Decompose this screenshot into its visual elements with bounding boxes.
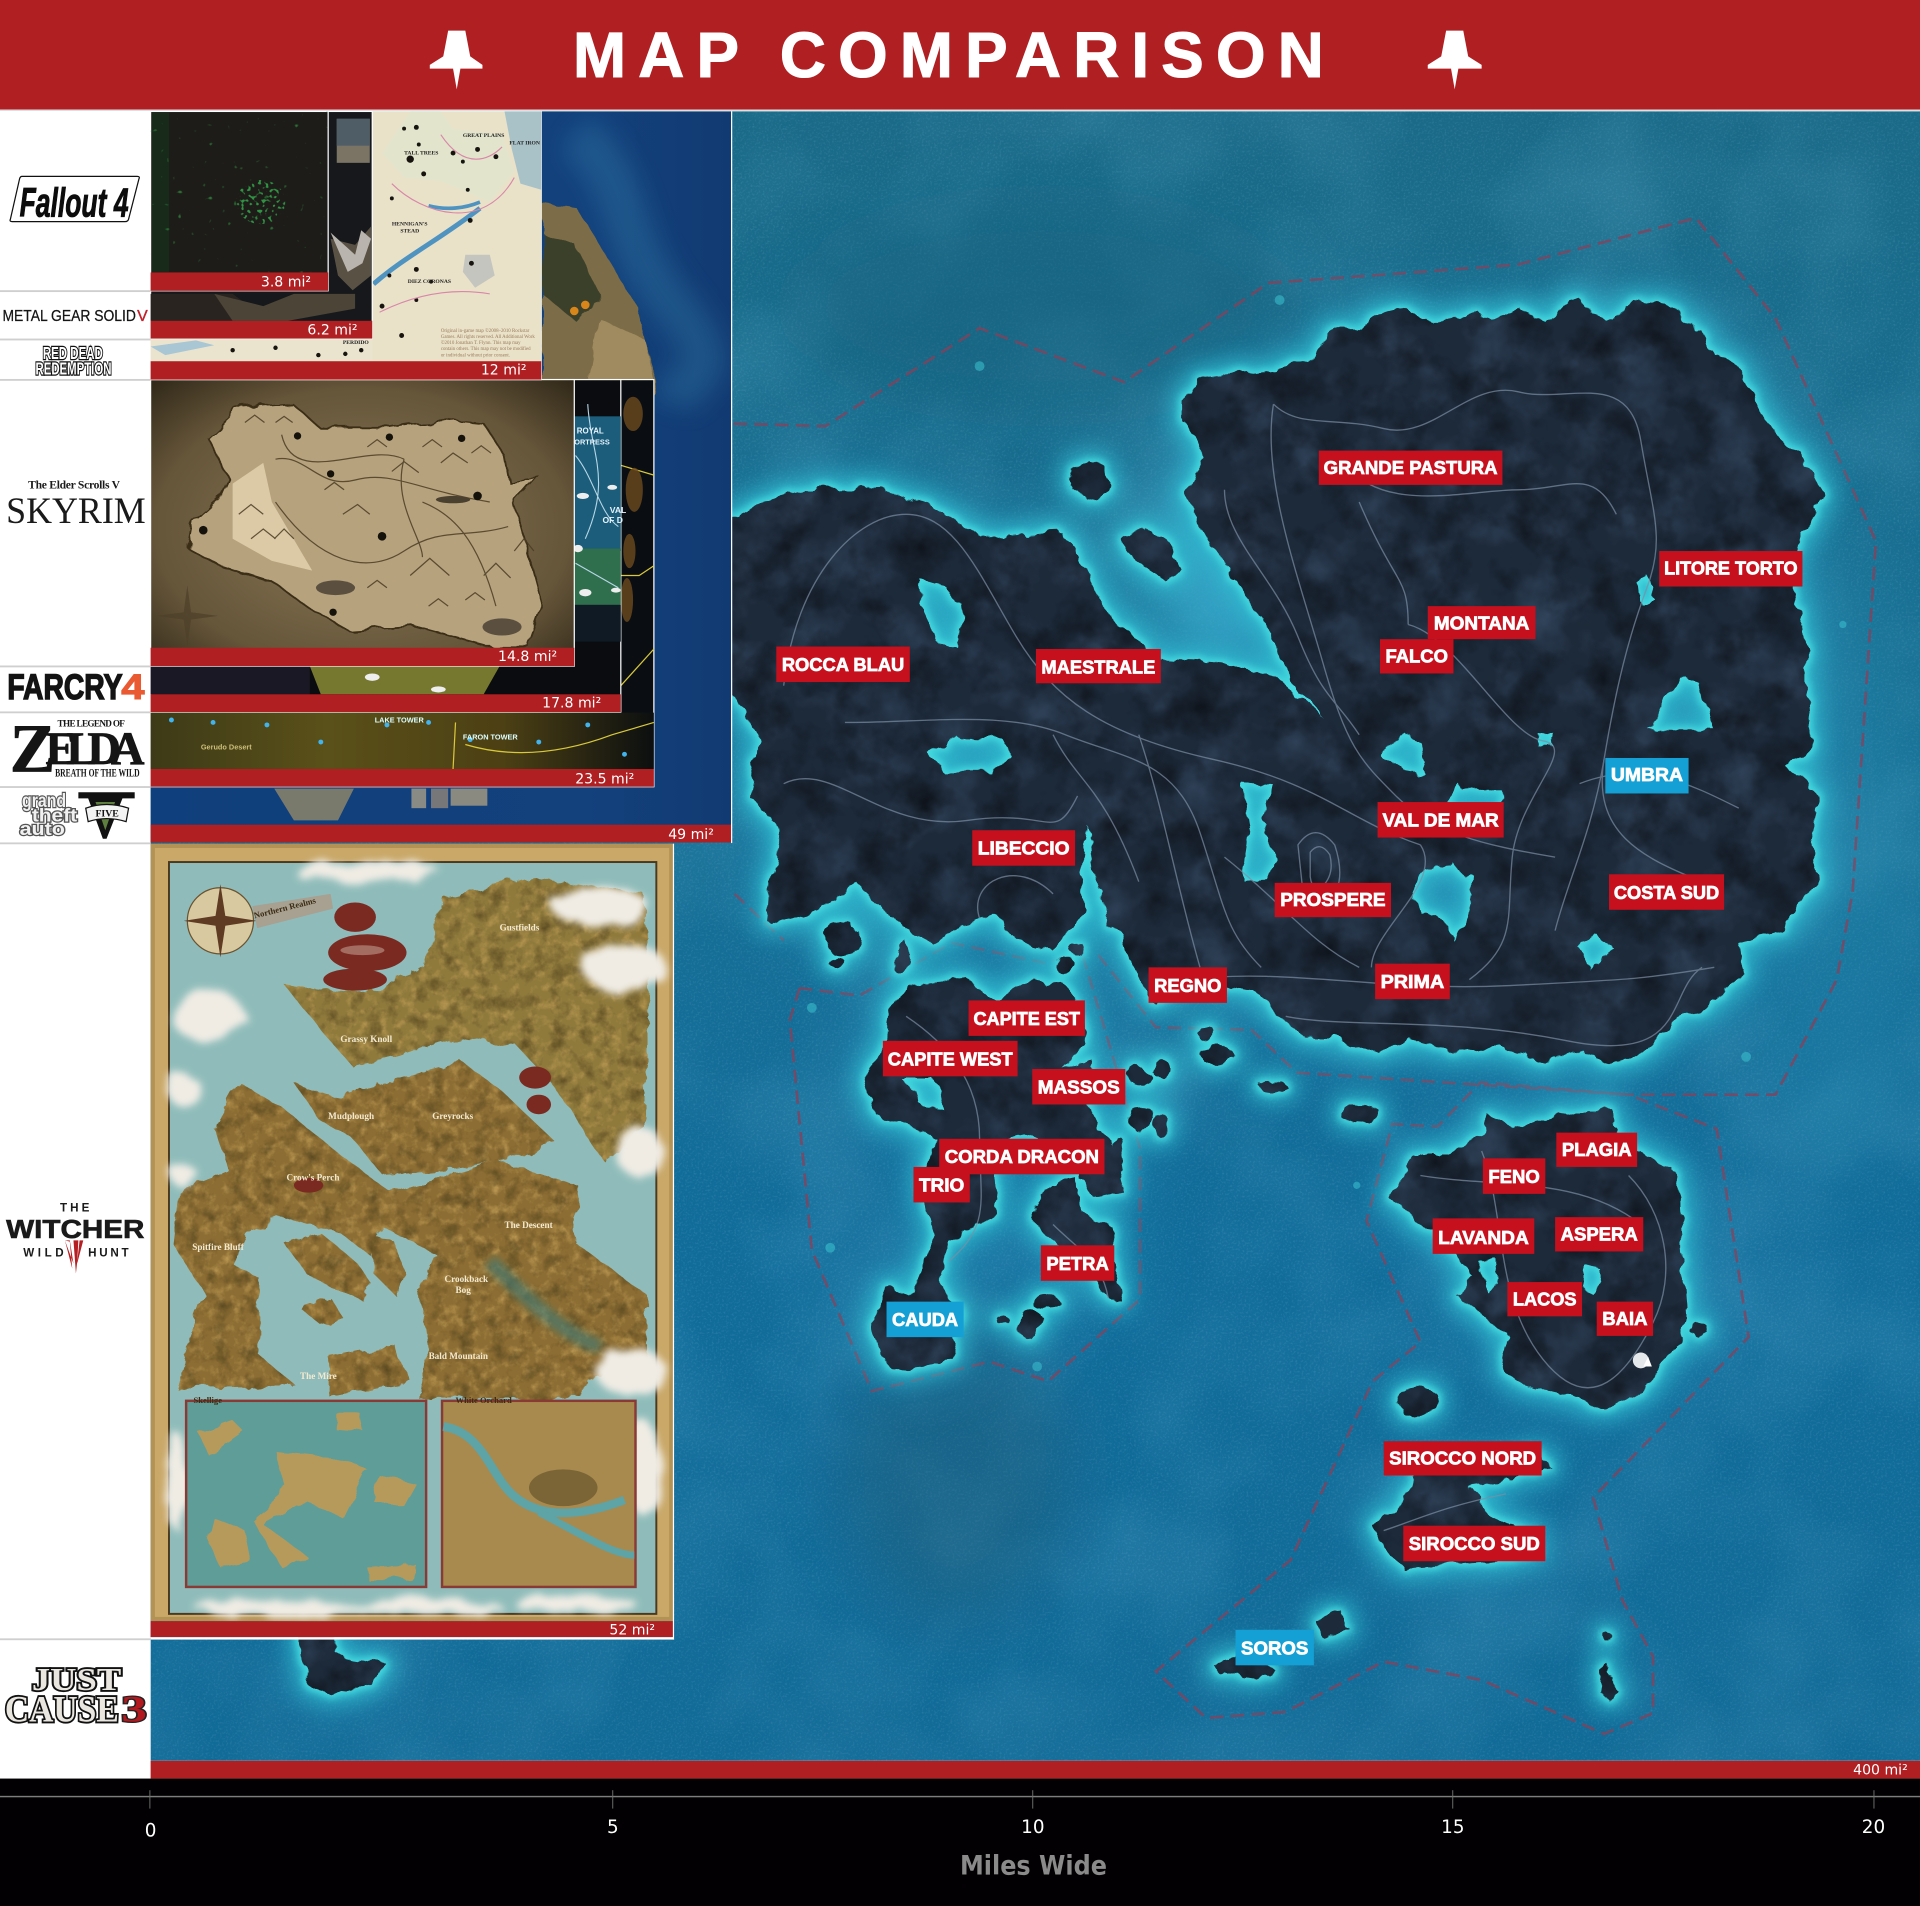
panel: Witcher 3 map: Greyrocks [432, 1111, 474, 1121]
label: Petra [1041, 1245, 1114, 1281]
icon: right pin [1428, 31, 1482, 89]
logo: Witcher 3 Wild Hunt: THE [60, 1202, 90, 1215]
panel: Red Dead Redemption map: GREAT PLAINS [463, 133, 504, 139]
label: Grande Pastura [1319, 451, 1502, 485]
size bar: 6.2 sq mi: 6.2 mi² [307, 322, 358, 338]
label: Massos [1032, 1069, 1125, 1104]
panel: Far Cry 4 map: ROYAL [577, 426, 604, 435]
logo: GTA V: theft [32, 805, 77, 826]
size bar: 14.8 sq mi [151, 648, 574, 666]
size bar: 52 sq mi [151, 1621, 673, 1639]
logo: Fallout 4: Fallout 4 [20, 180, 129, 226]
panel: Red Dead Redemption map: HENNIGAN'S [392, 221, 427, 227]
panel: Just Cause 3 ocean map [151, 110, 1920, 1761]
compass rose: Northern Realms [253, 895, 317, 920]
axis: miles wide: 20 [1862, 1817, 1885, 1838]
panel: Witcher 3 map: Bog [456, 1285, 471, 1295]
title: MAP COMPARISON [573, 20, 1324, 91]
label: Cauda: CAUDA [892, 1309, 958, 1330]
label: Rocca Blau: ROCCA BLAU [782, 654, 904, 675]
logo: Zelda Breath of the Wild: THE LEGEND OF [58, 719, 125, 729]
label: Val de Mar: VAL DE MAR [1382, 810, 1499, 831]
panel: Red Dead Redemption map: STEAD [400, 229, 419, 235]
label: Rocca Blau [776, 647, 910, 682]
label: Prospere [1275, 883, 1391, 917]
label: Umbra: UMBRA [1611, 764, 1683, 785]
label: Petra: PETRA [1046, 1253, 1109, 1274]
logo: GTA V: grand [22, 790, 66, 812]
logo: Witcher 3 Wild Hunt: WITCHER [6, 1216, 145, 1244]
label: Sirocco Sud [1403, 1526, 1545, 1561]
panel: Witcher 3 map: Crookback [444, 1274, 489, 1284]
panel: Witcher 3 map [151, 844, 674, 1640]
size bar: 17.8 sq mi: 17.8 mi² [542, 696, 601, 712]
inset: White Orchard [442, 1395, 636, 1587]
logo: Far Cry 4: FARCRY [7, 667, 123, 707]
label: Sirocco Sud: SIROCCO SUD [1409, 1533, 1540, 1554]
label: Falco [1380, 639, 1453, 673]
label: Capite Est: CAPITE EST [973, 1008, 1081, 1029]
panel: Witcher 3 map: Mudplough [328, 1111, 374, 1121]
size bar: 23.5 sq mi: 23.5 mi² [575, 772, 634, 788]
size bar: 23.5 sq mi [151, 769, 654, 788]
label: Feno: FENO [1488, 1166, 1540, 1187]
logo: Skyrim: The Elder Scrolls V [28, 479, 121, 492]
size bar: 12 sq mi: 12 mi² [481, 363, 527, 379]
panel: GTA V map [151, 111, 731, 843]
label: Capite Est [969, 1000, 1085, 1036]
panel: Far Cry 4 map: ORTRESS [574, 437, 610, 446]
logo: GTA V [20, 790, 135, 839]
panel: Red Dead Redemption map: DIEZ CORONAS [408, 279, 451, 285]
inset: Skellige: Skellige [193, 1395, 222, 1405]
label: Val de Mar [1378, 802, 1504, 838]
island road network [784, 390, 1739, 1531]
logo: Red Dead Redemption: REDEMPTION [36, 359, 111, 379]
label: Lavanda: LAVANDA [1438, 1227, 1529, 1248]
size bar: Just Cause 3 [151, 1761, 1920, 1779]
panel: Witcher 3 map: Gustfields [500, 923, 540, 933]
size bar: 3.8 sq mi: 3.8 mi² [261, 275, 311, 291]
label: Lacos [1507, 1282, 1582, 1316]
axis title: Miles Wide [960, 1851, 1107, 1882]
label: Capite West: CAPITE WEST [888, 1048, 1013, 1069]
logo: Just Cause 3: 3 [121, 1689, 147, 1730]
axis: miles wide: 0 [145, 1821, 156, 1842]
panel: Far Cry 4 map: OF D [602, 515, 623, 525]
panel: Zelda Breath of the Wild map [151, 380, 654, 788]
label: Litore Torto [1659, 551, 1802, 587]
label: Aspera: ASPERA [1561, 1223, 1638, 1244]
logo: GTA V: FIVE [95, 809, 119, 820]
logo: Just Cause 3: CAUSE [5, 1689, 119, 1730]
label: Sirocco Nord: SIROCCO NORD [1389, 1447, 1536, 1468]
panel: Red Dead Redemption map: contain others. This map may not be modified [441, 347, 531, 352]
label: Libeccio [972, 830, 1075, 866]
label: Regno: REGNO [1154, 975, 1221, 996]
logo: Just Cause 3 [5, 1662, 147, 1730]
logo: Skyrim: SKYRIM [6, 490, 146, 531]
label: Soros [1236, 1630, 1314, 1665]
panel: Zelda Breath of the Wild map: FARON TOWER [463, 733, 518, 742]
panel: Witcher 3 map: Spitfire Bluff [192, 1242, 245, 1252]
inset: Skellige [186, 1395, 426, 1587]
label: Montana [1428, 606, 1536, 639]
panel: Witcher 3 map: Grassy Knoll [340, 1034, 393, 1044]
size bar: 52 sq mi: 52 mi² [609, 1623, 655, 1639]
label: Trio: TRIO [919, 1174, 964, 1195]
panel: Witcher 3 map: Bald Mountain [429, 1351, 488, 1361]
panel: Witcher 3 map: Crow's Perch [287, 1172, 339, 1182]
logo: Just Cause 3: JUST [32, 1662, 121, 1697]
logo: Metal Gear Solid V: V [137, 308, 148, 325]
label: Lavanda [1433, 1218, 1534, 1254]
panel: Zelda Breath of the Wild map: Gerudo Desert [201, 742, 252, 751]
logo: Witcher 3 Wild Hunt: HUNT [88, 1246, 129, 1259]
panel: Red Dead Redemption map: or individual without prior consent. [441, 353, 510, 358]
logo: Red Dead Redemption [36, 343, 111, 379]
panel: Far Cry 4 map: VAL [610, 505, 626, 515]
size bar: Just Cause 3: 400 mi² [1853, 1762, 1908, 1778]
label: Libeccio: LIBECCIO [978, 838, 1070, 859]
label: Corda Dracon: CORDA DRACON [945, 1146, 1099, 1167]
size bar: 49 sq mi: 49 mi² [668, 827, 714, 843]
size bar: 17.8 sq mi [151, 694, 621, 712]
label: Litore Torto: LITORE TORTO [1664, 557, 1798, 578]
axis: miles wide: 5 [607, 1817, 619, 1838]
label: Trio [913, 1167, 970, 1202]
left logo column [0, 110, 151, 1778]
panel: Red Dead Redemption map: FLAT IRON [509, 140, 540, 146]
label: Maestrale [1036, 649, 1161, 683]
label: Umbra [1605, 758, 1689, 793]
logo: GTA V: auto [20, 818, 65, 839]
header band [0, 0, 1920, 111]
logo: Witcher 3 Wild Hunt: WILD [23, 1246, 64, 1259]
panel: Red Dead Redemption map: Original in-game map ©2008–2010 Rockstar [441, 328, 530, 334]
label: Massos: MASSOS [1038, 1076, 1120, 1097]
panel: Witcher 3 map: The Descent [504, 1220, 554, 1230]
sea border dashes [733, 218, 1876, 1734]
islands [298, 298, 1824, 1704]
map region labels [776, 451, 1802, 1665]
inset: White Orchard: White Orchard [456, 1395, 512, 1405]
icon: left pin [430, 31, 482, 89]
label: Plagia: PLAGIA [1562, 1139, 1632, 1160]
panel: Red Dead Redemption map: ©2010 Jonathan T. Flynn. This map may [441, 340, 521, 346]
logo: Metal Gear Solid V: METAL GEAR SOLID [2, 308, 136, 325]
label: Montana: MONTANA [1434, 612, 1529, 633]
label: Regno [1149, 967, 1227, 1003]
label: Plagia [1556, 1133, 1637, 1167]
label: Costa Sud [1609, 874, 1724, 910]
label: Prima [1375, 964, 1450, 999]
logo: Zelda Breath of the Wild: ELDA [45, 724, 145, 775]
row separators [0, 290, 151, 1640]
size bar: 12 sq mi [151, 361, 541, 380]
label: Capite West [883, 1041, 1018, 1076]
size bar: 49 sq mi [151, 825, 731, 843]
panel: Red Dead Redemption map: TALL TREES [404, 150, 438, 156]
size bar: 14.8 sq mi: 14.8 mi² [498, 649, 557, 665]
panel: Red Dead Redemption map: Games. All rights reserved. All Additional Work [441, 335, 535, 340]
label: Cauda [887, 1302, 964, 1337]
panel: Red Dead Redemption map [151, 111, 541, 380]
logo: Fallout 4 [10, 176, 139, 226]
panel: Zelda Breath of the Wild map: LAKE TOWER [375, 715, 425, 724]
place marker [1633, 1352, 1652, 1368]
label: Grande Pastura: GRANDE PASTURA [1324, 457, 1498, 478]
label: Prospere: PROSPERE [1280, 889, 1386, 910]
panel: Skyrim map [151, 380, 574, 666]
logo: Zelda Breath of the Wild: Z [10, 710, 56, 786]
compass rose [184, 884, 333, 958]
logo: Far Cry 4: 4 [121, 667, 145, 707]
logo: Zelda Breath of the Wild [10, 710, 145, 786]
label: Costa Sud: COSTA SUD [1614, 882, 1719, 903]
panel: Far Cry 4 map [151, 380, 626, 712]
label: Falco: FALCO [1386, 645, 1448, 666]
size bar: 6.2 sq mi [151, 321, 372, 339]
size bar: 3.8 sq mi [151, 272, 328, 291]
label: Sirocco Nord [1384, 1441, 1542, 1476]
label: Soros: SOROS [1241, 1637, 1308, 1658]
logo: Witcher 3 Wild Hunt [6, 1202, 145, 1273]
panel: Red Dead Redemption map: PERDIDO [343, 340, 369, 346]
label: Corda Dracon [939, 1139, 1104, 1174]
label: Baia: BAIA [1602, 1308, 1648, 1329]
axis: miles wide: 15 [1441, 1817, 1465, 1838]
panel: Witcher 3 map: The Mire [300, 1371, 337, 1381]
label: Feno [1483, 1158, 1545, 1194]
panel: Metal Gear Solid V map [151, 111, 372, 339]
label: Lacos: LACOS [1513, 1288, 1577, 1309]
label: Prima: PRIMA [1381, 971, 1444, 992]
axis: miles wide: 10 [1021, 1817, 1045, 1838]
logo: Zelda Breath of the Wild: BREATH OF THE WILD [55, 766, 140, 779]
label: Aspera [1555, 1217, 1643, 1251]
logo: Red Dead Redemption: RED DEAD [43, 343, 103, 363]
label: Maestrale: MAESTRALE [1041, 656, 1155, 677]
axis: miles wide [0, 1779, 1920, 1906]
label: Baia [1597, 1302, 1653, 1336]
panel: Fallout 4 map [151, 111, 328, 291]
